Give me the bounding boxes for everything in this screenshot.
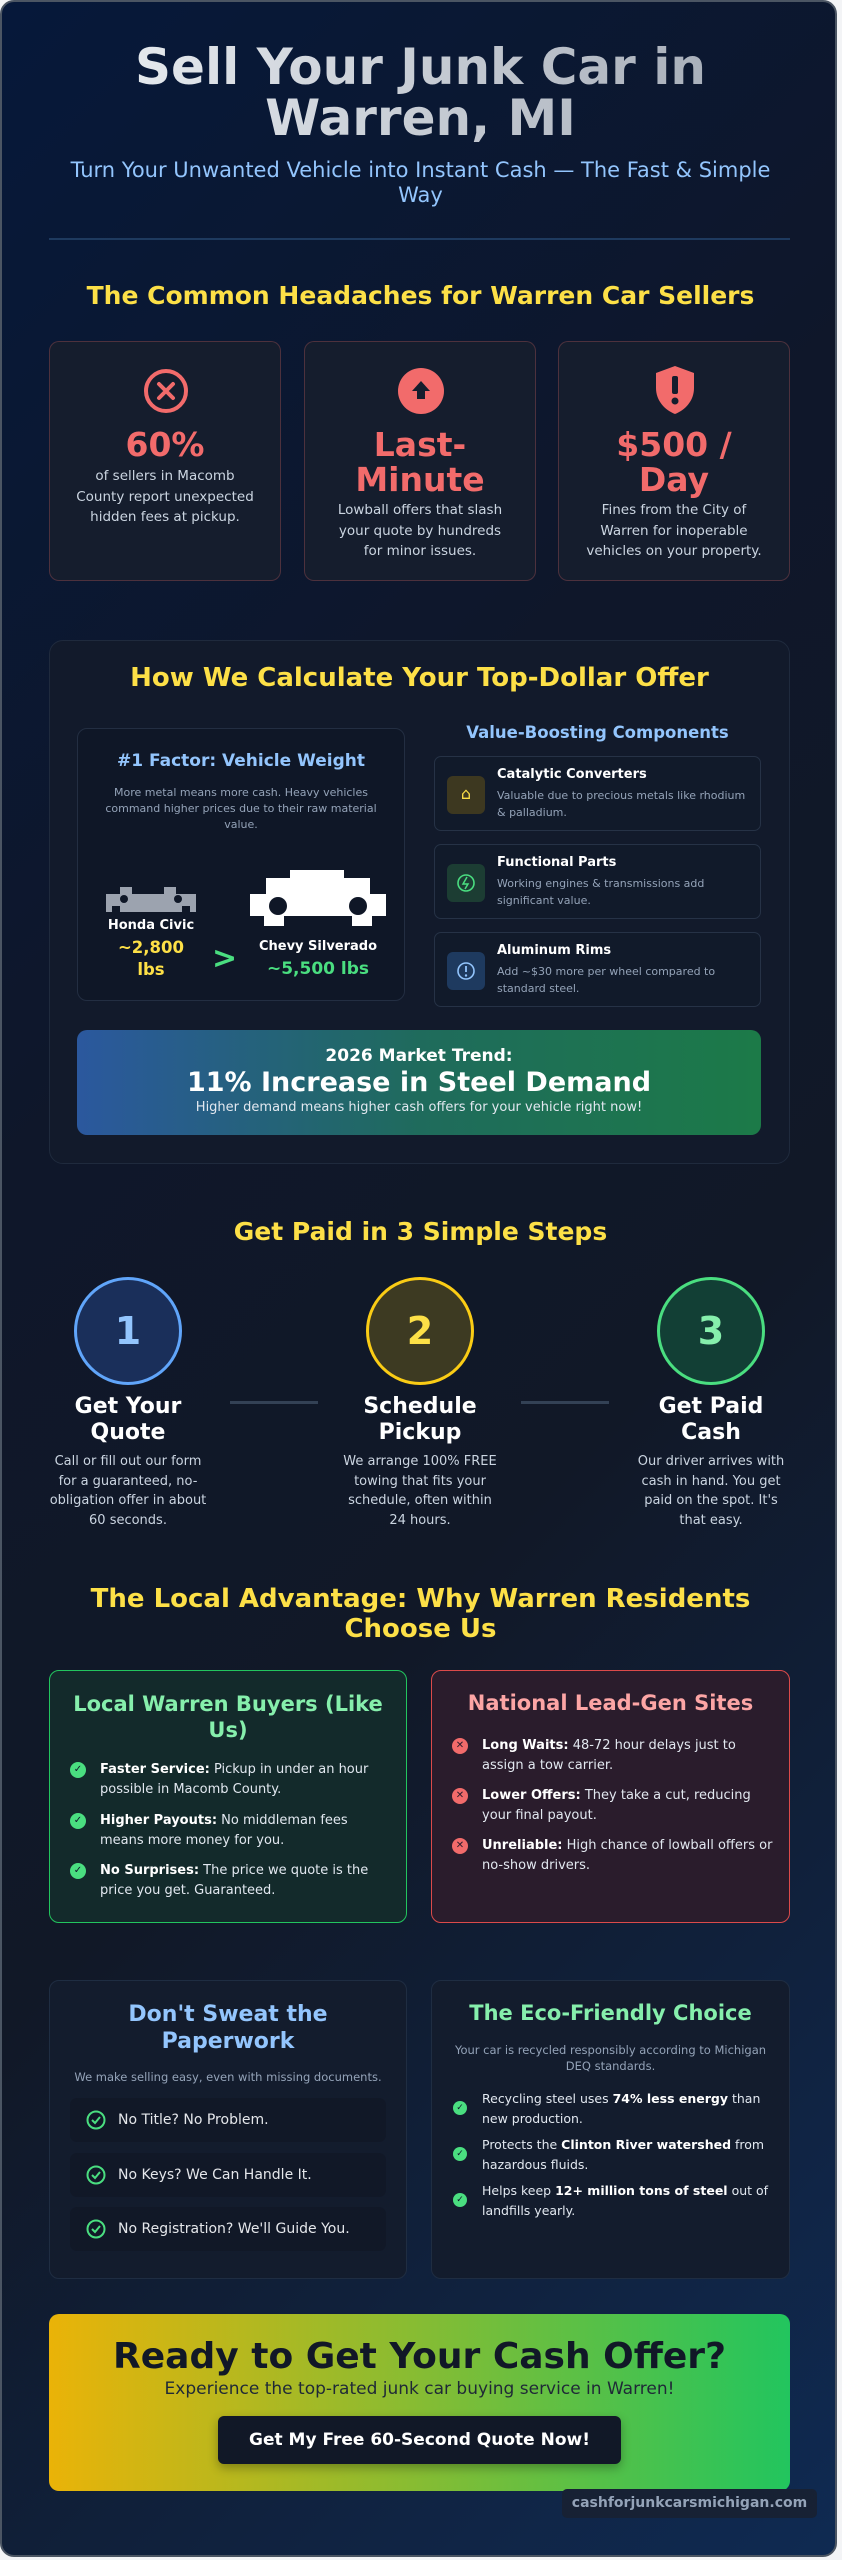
panel: national lead-gen <box>431 1670 790 1923</box>
panel: national lead-gen: ✕ <box>456 1790 464 1801</box>
panel: paperwork: No Registration? We'll Guide You. <box>118 2221 350 2237</box>
step 2 <box>366 1277 474 1385</box>
banner: market trend: Higher demand means higher cash offers for your vehicle right now! <box>196 1100 642 1115</box>
panel: local buyers: Higher Payouts: No middleman fees means more money for you. <box>100 1813 348 1848</box>
banner: market trend: 2026 Market Trend: <box>325 1046 513 1066</box>
banner: market trend <box>77 1030 761 1135</box>
cta banner: Ready to Get Your Cash Offer? <box>113 2336 726 2377</box>
item: aluminum rims: Add ~$30 more per wheel compared to standard steel. <box>497 965 715 995</box>
icon: x circle <box>144 369 188 413</box>
item: catalytic <box>434 756 761 831</box>
step 1 <box>74 1277 182 1385</box>
panel: eco-friendly: ✓ <box>456 2103 464 2113</box>
subpanel: vehicle weight: > <box>212 941 237 976</box>
panel: hidden fees: 60% <box>126 425 204 464</box>
subtitle: Turn Your Unwanted Vehicle into Instant Cash — The Fast & Simple Way <box>71 158 770 207</box>
subpanel: vehicle weight <box>77 728 405 1001</box>
step 3 <box>657 1277 765 1385</box>
text: Get Your <box>75 1394 181 1419</box>
icon: truck <box>250 870 386 926</box>
cta banner: Experience the top-rated junk car buying service in Warren! <box>165 2379 674 2399</box>
panel: last-minute <box>304 341 536 581</box>
button: Get My Free 60-Second Quote Now! <box>249 2430 590 2450</box>
item: functional parts: Functional Parts <box>497 855 616 870</box>
subpanel: vehicle weight: Chevy Silverado <box>259 939 377 954</box>
button <box>218 2416 621 2464</box>
subpanel: vehicle weight: More metal means more cash. Heavy vehicles command higher prices due to their raw material value. <box>105 786 377 831</box>
text: Schedule <box>363 1394 477 1419</box>
item: functional parts: Working engines & transmissions add significant value. <box>497 877 704 907</box>
step 1: 1 <box>115 1309 141 1353</box>
panel: national lead-gen: Unreliable: High chance of lowball offers or no-show drivers. <box>482 1838 772 1873</box>
icon: shield <box>656 366 694 414</box>
item: catalytic: ⌂ <box>461 784 471 803</box>
heading: How We Calculate Your Top-Dollar Offer <box>130 663 709 693</box>
panel: hidden fees <box>49 341 281 581</box>
panel: paperwork: No Keys? We Can Handle It. <box>118 2167 312 2183</box>
item: aluminum rims: Aluminum Rims <box>497 943 611 958</box>
heading: value components: Value-Boosting Components <box>466 723 729 742</box>
title <box>2 42 839 144</box>
heading: headaches: The Common Headaches for Warren Car Sellers <box>87 281 754 310</box>
icon: small car <box>106 887 196 912</box>
panel: eco-friendly: Recycling steel uses 74% less energy than new production. <box>482 2091 760 2126</box>
text: Our driver arrives with cash in hand. You get paid on the spot. It's that easy. <box>638 1454 784 1528</box>
text: Call or fill out our form for a guaranteed, no-obligation offer in about 60 seconds. <box>50 1454 206 1528</box>
text: We arrange 100% FREE towing that fits your schedule, often within 24 hours. <box>343 1454 497 1528</box>
item: catalytic: Catalytic Converters <box>497 767 647 782</box>
text: Quote <box>91 1420 165 1445</box>
panel: national lead-gen: Lower Offers: They take a cut, reducing your final payout. <box>482 1788 751 1823</box>
panel: paperwork: Don't Sweat the Paperwork <box>128 2002 328 2054</box>
watermark: cashforjunkcarsmichigan.com <box>572 2495 807 2511</box>
cta banner <box>49 2314 790 2491</box>
heading: steps: Get Paid in 3 Simple Steps <box>234 1217 607 1246</box>
panel: eco-friendly: Your car is recycled responsibly according to Michigan DEQ standards. <box>455 2043 766 2073</box>
panel: hidden fees: of sellers in Macomb County report unexpected hidden fees at pickup. <box>76 468 254 525</box>
panel: local buyers: ✓ <box>74 1865 82 1876</box>
panel: local buyers <box>49 1670 407 1923</box>
panel: national lead-gen: ✕ <box>456 1840 464 1851</box>
panel: fines <box>558 341 790 581</box>
item: functional parts <box>434 844 761 919</box>
panel: fines: $500 / <box>616 425 732 464</box>
panel: paperwork: No Title? No Problem. <box>118 2112 269 2128</box>
subpanel: vehicle weight: Honda Civic <box>108 918 194 933</box>
panel: eco-friendly: Helps keep 12+ million tons of steel out of landfills yearly. <box>482 2183 768 2218</box>
panel: national lead-gen: National Lead-Gen Sites <box>468 1691 753 1715</box>
item: aluminum rims <box>434 932 761 1007</box>
watermark <box>562 2489 817 2518</box>
panel: paperwork: We make selling easy, even with missing documents. <box>74 2070 382 2084</box>
panel: local buyers: Local Warren Buyers (Like Us) <box>73 1692 383 1742</box>
title: Sell Your Junk Car in <box>135 38 706 96</box>
panel: national lead-gen: Long Waits: 48-72 hour delays just to assign a tow carrier. <box>482 1738 736 1773</box>
panel: last-minute: Minute <box>355 460 485 499</box>
panel: eco-friendly: ✓ <box>456 2195 464 2205</box>
text: Pickup <box>379 1420 461 1445</box>
text: Cash <box>681 1420 741 1445</box>
panel: local buyers: ✓ <box>74 1764 82 1775</box>
step 2: 2 <box>407 1309 433 1353</box>
title: Warren, MI <box>265 89 576 147</box>
step 3: 3 <box>698 1309 724 1353</box>
subpanel: vehicle weight: ~2,800 <box>118 938 184 957</box>
item: catalytic: Valuable due to precious metals like rhodium & palladium. <box>497 789 745 819</box>
heading: local advantage: The Local Advantage: Why Warren Residents Choose Us <box>91 1584 750 1644</box>
panel: local buyers: No Surprises: The price we quote is the price you get. Guaranteed. <box>100 1863 368 1898</box>
icon: arrow up circle <box>398 368 444 414</box>
panel: paperwork <box>49 1980 407 2279</box>
panel: eco-friendly: ✓ <box>456 2149 464 2159</box>
panel: last-minute: Last- <box>374 425 466 464</box>
panel: eco-friendly: Protects the Clinton River watershed from hazardous fluids. <box>482 2137 764 2172</box>
panel: national lead-gen: ✕ <box>456 1740 464 1751</box>
panel: eco-friendly <box>431 1980 790 2279</box>
arrow: connector 1 <box>230 1401 318 1404</box>
subpanel: vehicle weight: lbs <box>137 960 165 979</box>
banner: market trend: 11% Increase in Steel Demand <box>187 1067 651 1098</box>
subpanel: vehicle weight: ~5,500 lbs <box>267 959 369 979</box>
arrow: connector 2 <box>521 1401 609 1404</box>
panel: last-minute: Lowball offers that slash your quote by hundreds for minor issues. <box>338 502 502 559</box>
panel: eco-friendly: The Eco-Friendly Choice <box>469 2001 752 2025</box>
panel: local buyers: ✓ <box>74 1815 82 1826</box>
panel: fines: Day <box>639 460 709 499</box>
panel: calculate offer <box>49 640 790 1164</box>
subpanel: vehicle weight: #1 Factor: Vehicle Weight <box>117 751 365 771</box>
text: Get Paid <box>659 1394 763 1419</box>
panel: local buyers: Faster Service: Pickup in under an hour possible in Macomb County. <box>100 1762 368 1797</box>
panel: fines: Fines from the City of Warren for inoperable vehicles on your property. <box>586 502 762 559</box>
